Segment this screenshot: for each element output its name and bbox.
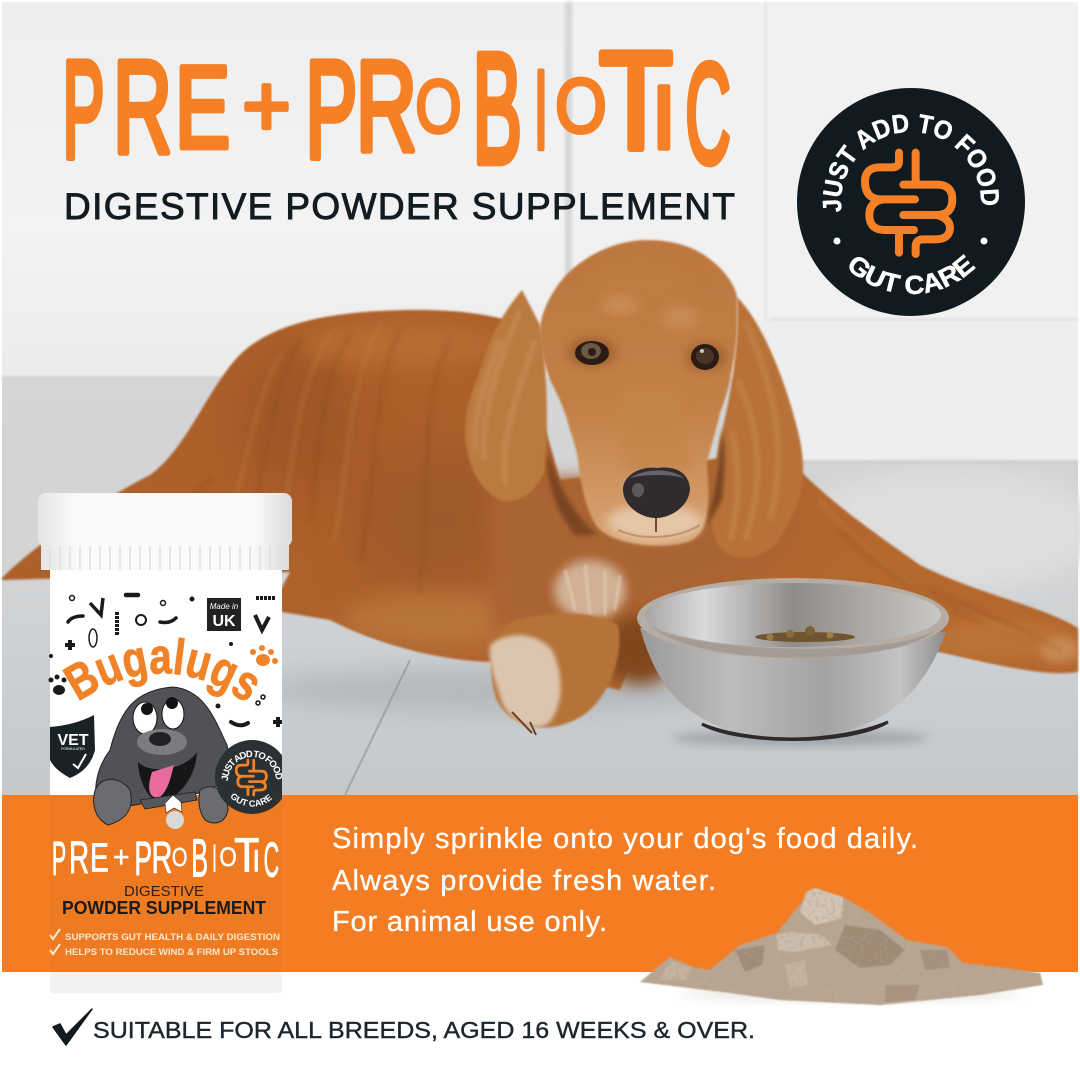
left eye bbox=[575, 341, 609, 365]
instructions text bbox=[332, 823, 918, 938]
icon: check mark bbox=[53, 1009, 92, 1045]
main title: C bbox=[685, 36, 731, 194]
instructions text: Simply sprinkle onto your dog's food daily. bbox=[332, 823, 918, 855]
jar benefit lines bbox=[50, 929, 280, 958]
mini badge bbox=[215, 740, 282, 814]
main title: T bbox=[599, 23, 673, 178]
dog face details bbox=[568, 260, 726, 540]
dog head bbox=[540, 240, 737, 546]
instructions text: For animal use only. bbox=[332, 906, 607, 938]
golden retriever bbox=[2, 240, 1080, 735]
suitability note: SUITABLE FOR ALL BREEDS, AGED 16 WEEKS & OVER. bbox=[93, 1017, 755, 1043]
dog front leg and paw bbox=[490, 614, 619, 735]
jar product name: E bbox=[90, 835, 109, 881]
badge: just add to food bbox=[797, 88, 1025, 316]
product jar bbox=[38, 493, 292, 993]
jar product name: P bbox=[134, 833, 152, 886]
jar product name: I bbox=[212, 838, 217, 881]
jar benefit lines: HELPS TO REDUCE WIND & FIRM UP STOOLS bbox=[65, 947, 278, 958]
badge: just add to food: JUST ADD TO FOOD bbox=[822, 114, 999, 212]
jar product name: O bbox=[172, 843, 187, 872]
powder pile bbox=[640, 888, 1043, 1005]
jar product name: T bbox=[234, 830, 259, 882]
logo paw bbox=[250, 645, 278, 666]
neck and chest bbox=[490, 470, 798, 630]
dark gaps beside muzzle bbox=[547, 430, 725, 535]
jar powder supplement: POWDER SUPPLEMENT bbox=[62, 898, 266, 918]
jar subtitle: DIGESTIVE bbox=[124, 883, 204, 900]
jar benefit lines: SUPPORTS GUT HEALTH & DAILY DIGESTION bbox=[65, 932, 280, 943]
nose bbox=[623, 468, 690, 518]
main title: R bbox=[113, 35, 172, 181]
dog right ear bbox=[711, 297, 803, 558]
main title: B bbox=[473, 22, 522, 197]
kibble bbox=[755, 626, 855, 642]
jar product name: P bbox=[52, 831, 66, 885]
made in UK tag: Made in bbox=[210, 602, 239, 611]
steel food bowl bbox=[637, 578, 949, 740]
vet shield: VET bbox=[57, 732, 89, 749]
jar product name: R bbox=[69, 832, 89, 883]
jar product name: B bbox=[191, 828, 208, 888]
main title: E bbox=[175, 43, 230, 173]
main title: R bbox=[356, 35, 417, 179]
jar lid bbox=[38, 493, 292, 570]
made in UK tag bbox=[207, 598, 241, 631]
paw print bbox=[48, 674, 66, 695]
cartoon dog bbox=[94, 687, 229, 829]
main title bbox=[62, 22, 731, 197]
mini badge: JUST ADD TO FOOD bbox=[222, 750, 282, 781]
main title: I bbox=[651, 68, 676, 169]
made in UK tag: UK bbox=[212, 613, 236, 630]
main title: I bbox=[534, 48, 548, 173]
Bugalugs logo: Bugalugs bbox=[62, 637, 258, 701]
dog left ear bbox=[465, 290, 547, 501]
jar label orange section bbox=[50, 795, 282, 972]
dog body bbox=[2, 310, 1078, 690]
orange band bbox=[2, 795, 1078, 972]
doodles bbox=[49, 595, 282, 727]
subtitle: DIGESTIVE POWDER SUPPLEMENT bbox=[64, 186, 735, 227]
icon: intestine bbox=[865, 153, 952, 254]
jar product name: O bbox=[219, 843, 237, 873]
main title: O bbox=[555, 64, 607, 150]
jar product name: R bbox=[152, 832, 172, 882]
main title: + bbox=[242, 58, 291, 155]
jar product name: C bbox=[264, 834, 279, 888]
main title: P bbox=[305, 32, 357, 187]
cream chest fur bbox=[554, 560, 626, 620]
shadow between leg and bowl bbox=[600, 615, 680, 685]
mini badge: GUT CARE bbox=[231, 794, 272, 807]
fur shading bbox=[60, 323, 1080, 662]
jar product name: + bbox=[113, 841, 129, 874]
vet shield: FORMULATED bbox=[61, 747, 85, 751]
right eye bbox=[691, 344, 719, 370]
main title: O bbox=[416, 66, 461, 149]
badge: just add to food: GUT CARE bbox=[849, 254, 976, 294]
jar product name bbox=[52, 828, 279, 888]
instructions text: Always provide fresh water. bbox=[332, 865, 716, 897]
jar product name: I bbox=[252, 843, 261, 879]
main title: P bbox=[62, 31, 105, 187]
vet shield bbox=[50, 715, 95, 778]
